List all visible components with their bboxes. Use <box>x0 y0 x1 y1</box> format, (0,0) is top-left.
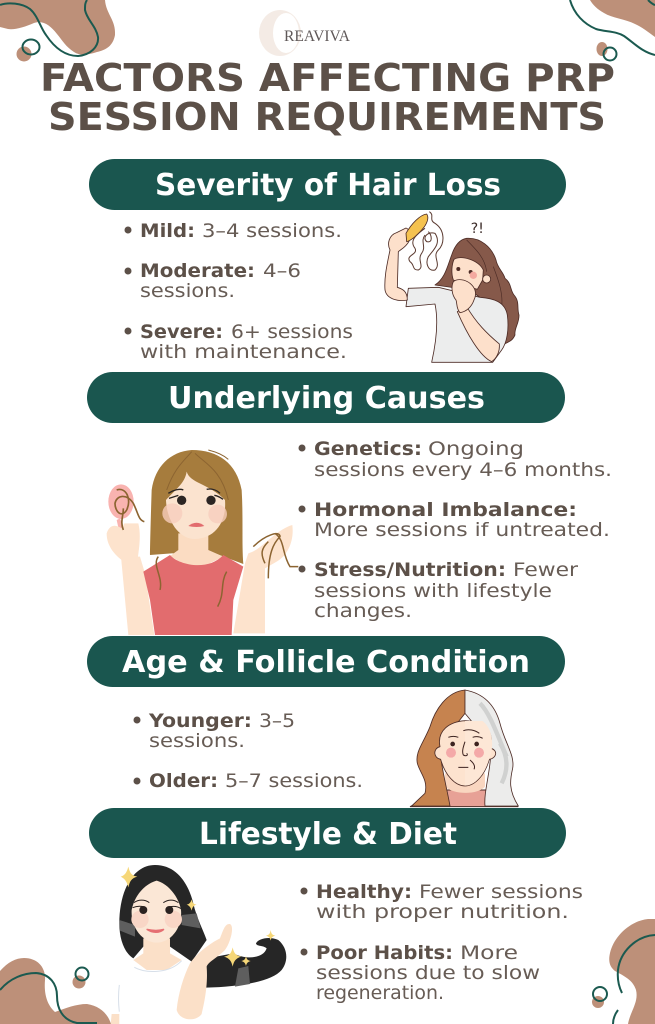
list: lifestyle and diet: Fewer sessions <box>419 881 583 903</box>
list: age and follicle condition: Younger: <box>148 710 252 732</box>
logo <box>259 10 351 56</box>
list: lifestyle and diet: regeneration. <box>316 982 444 1004</box>
section heading: Age & Follicle Condition <box>87 636 565 687</box>
list: underlying causes: Stress/Nutrition: <box>314 559 506 581</box>
list: underlying causes: sessions every 4–6 months. <box>314 459 612 481</box>
list: underlying causes: Ongoing <box>428 438 524 460</box>
decoration: bottom-left blob <box>0 958 111 1024</box>
title: SESSION REQUIREMENTS <box>48 95 606 140</box>
decoration: top-left blob <box>0 0 115 62</box>
list: age and follicle condition: 3–5 <box>259 710 295 732</box>
illustration: woman finding hair in brush: ?! <box>471 221 484 237</box>
title: FACTORS AFFECTING PRP <box>40 56 615 101</box>
list: lifestyle and diet: Healthy: <box>316 881 412 903</box>
illustration: woman finding hair in brush <box>385 212 519 362</box>
section heading: Underlying Causes <box>87 372 565 423</box>
list: severity of hair loss <box>124 220 353 363</box>
list: severity of hair loss: 3–4 sessions. <box>202 220 342 242</box>
list: age and follicle condition <box>134 710 363 792</box>
list: severity of hair loss: 4–6 <box>263 260 301 282</box>
section heading: Age & Follicle Condition: Age & Follicle Condition <box>122 645 530 680</box>
list: severity of hair loss: sessions. <box>140 280 235 302</box>
list: underlying causes: changes. <box>314 600 412 622</box>
list: underlying causes: Genetics: <box>314 438 422 460</box>
list: lifestyle and diet: More <box>460 942 518 964</box>
title <box>40 56 615 140</box>
illustration: half young half old woman <box>410 690 518 807</box>
section heading: Underlying Causes: Underlying Causes <box>168 381 485 416</box>
section heading: Lifestyle & Diet <box>89 808 566 858</box>
list: underlying causes <box>298 438 612 622</box>
list: severity of hair loss: Mild: <box>140 220 195 242</box>
decoration: bottom-right blob <box>592 919 655 1024</box>
list: lifestyle and diet <box>300 881 583 1004</box>
list: underlying causes: Hormonal Imbalance: <box>314 499 577 521</box>
list: underlying causes: Fewer <box>513 559 578 581</box>
list: lifestyle and diet: Poor Habits: <box>316 942 453 964</box>
decoration: top-right blob <box>570 0 655 60</box>
illustration: woman with healthy shiny hair <box>111 865 286 1024</box>
section heading: Severity of Hair Loss: Severity of Hair Loss <box>155 168 501 203</box>
list: lifestyle and diet: sessions due to slow <box>316 962 540 984</box>
list: age and follicle condition: sessions. <box>149 730 245 752</box>
list: severity of hair loss: 6+ sessions <box>231 321 353 343</box>
list: severity of hair loss: Moderate: <box>140 260 255 282</box>
section heading: Severity of Hair Loss <box>89 159 566 210</box>
list: underlying causes: More sessions if untreated. <box>314 519 610 541</box>
list: severity of hair loss: Severe: <box>140 321 223 343</box>
list: age and follicle condition: 5–7 sessions. <box>225 770 363 792</box>
section heading: Lifestyle & Diet: Lifestyle & Diet <box>199 817 457 852</box>
list: severity of hair loss: with maintenance. <box>140 341 347 363</box>
logo: REAVIVA <box>284 28 351 45</box>
list: lifestyle and diet: with proper nutrition. <box>316 901 569 923</box>
illustration: woman holding brush with fallen hair <box>107 450 298 635</box>
list: underlying causes: sessions with lifestyle <box>314 580 552 602</box>
list: age and follicle condition: Older: <box>149 770 218 792</box>
